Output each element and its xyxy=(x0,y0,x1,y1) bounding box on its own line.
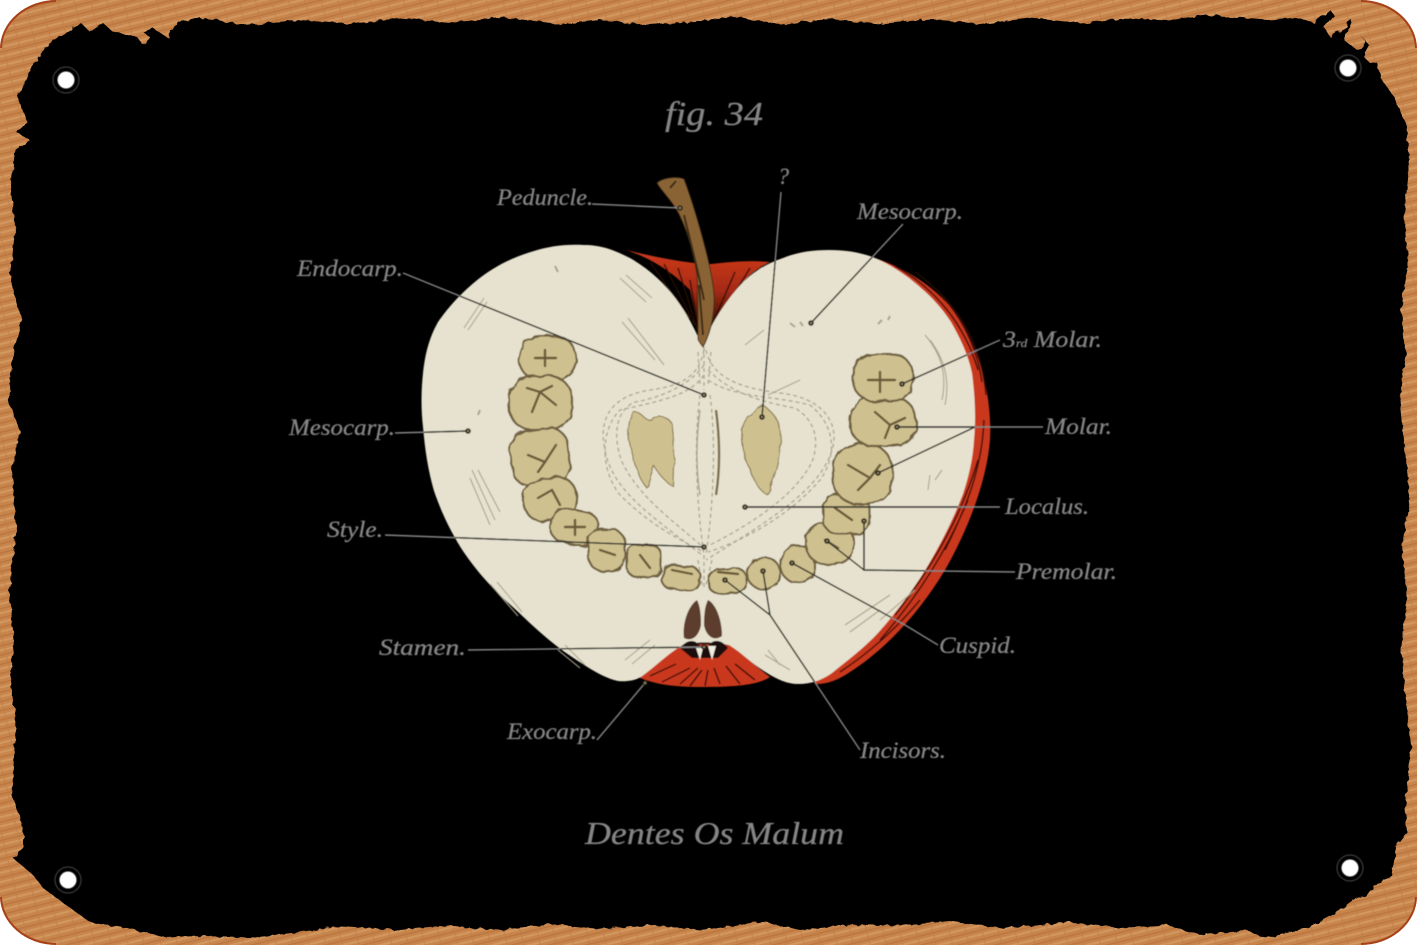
label: question mark: ? xyxy=(778,164,789,189)
label: Stamen: Stamen. xyxy=(379,635,466,660)
tooth fissures xyxy=(527,350,905,574)
label: Localus: Localus. xyxy=(1004,494,1089,519)
leader end dots xyxy=(466,206,904,685)
label: Mesocarp left: Mesocarp. xyxy=(288,415,395,440)
apple illustration xyxy=(422,178,990,687)
label: Mesocarp right: Mesocarp. xyxy=(856,199,963,224)
flesh texture marks xyxy=(464,266,947,670)
label: Style: Style. xyxy=(327,517,383,542)
mounting hole bottom left xyxy=(55,867,81,893)
loose tooth with long root xyxy=(742,404,781,494)
mounting hole top left xyxy=(53,67,79,93)
core slit xyxy=(697,410,719,495)
dotted core outline xyxy=(603,347,834,590)
label: Incisors: Incisors. xyxy=(859,738,946,763)
apple stem xyxy=(657,178,714,347)
red skin shading xyxy=(650,262,986,686)
apple red skin xyxy=(626,250,990,687)
apple calyx seeds xyxy=(680,600,728,660)
figure number: fig. 34 xyxy=(665,96,763,133)
mounting hole bottom right xyxy=(1337,855,1363,881)
label: Premolar: Premolar. xyxy=(1015,559,1117,584)
teeth xyxy=(508,336,916,594)
label: Exocarp: Exocarp. xyxy=(506,719,597,744)
leader lines over the apple xyxy=(423,256,976,682)
mounting hole top right xyxy=(1335,55,1361,81)
label: Molar: Molar. xyxy=(1044,414,1112,439)
label: Cuspid: Cuspid. xyxy=(939,633,1016,658)
loose molar with roots xyxy=(629,412,674,487)
apple flesh xyxy=(422,245,975,684)
leader lines outside the apple xyxy=(385,192,1043,750)
caption: Dentes Os Malum xyxy=(584,815,844,851)
label: Peduncle: Peduncle. xyxy=(496,185,593,210)
label: Endocarp: Endocarp. xyxy=(296,256,403,281)
label: 3rd Molar: 3rd Molar. xyxy=(1002,327,1102,352)
